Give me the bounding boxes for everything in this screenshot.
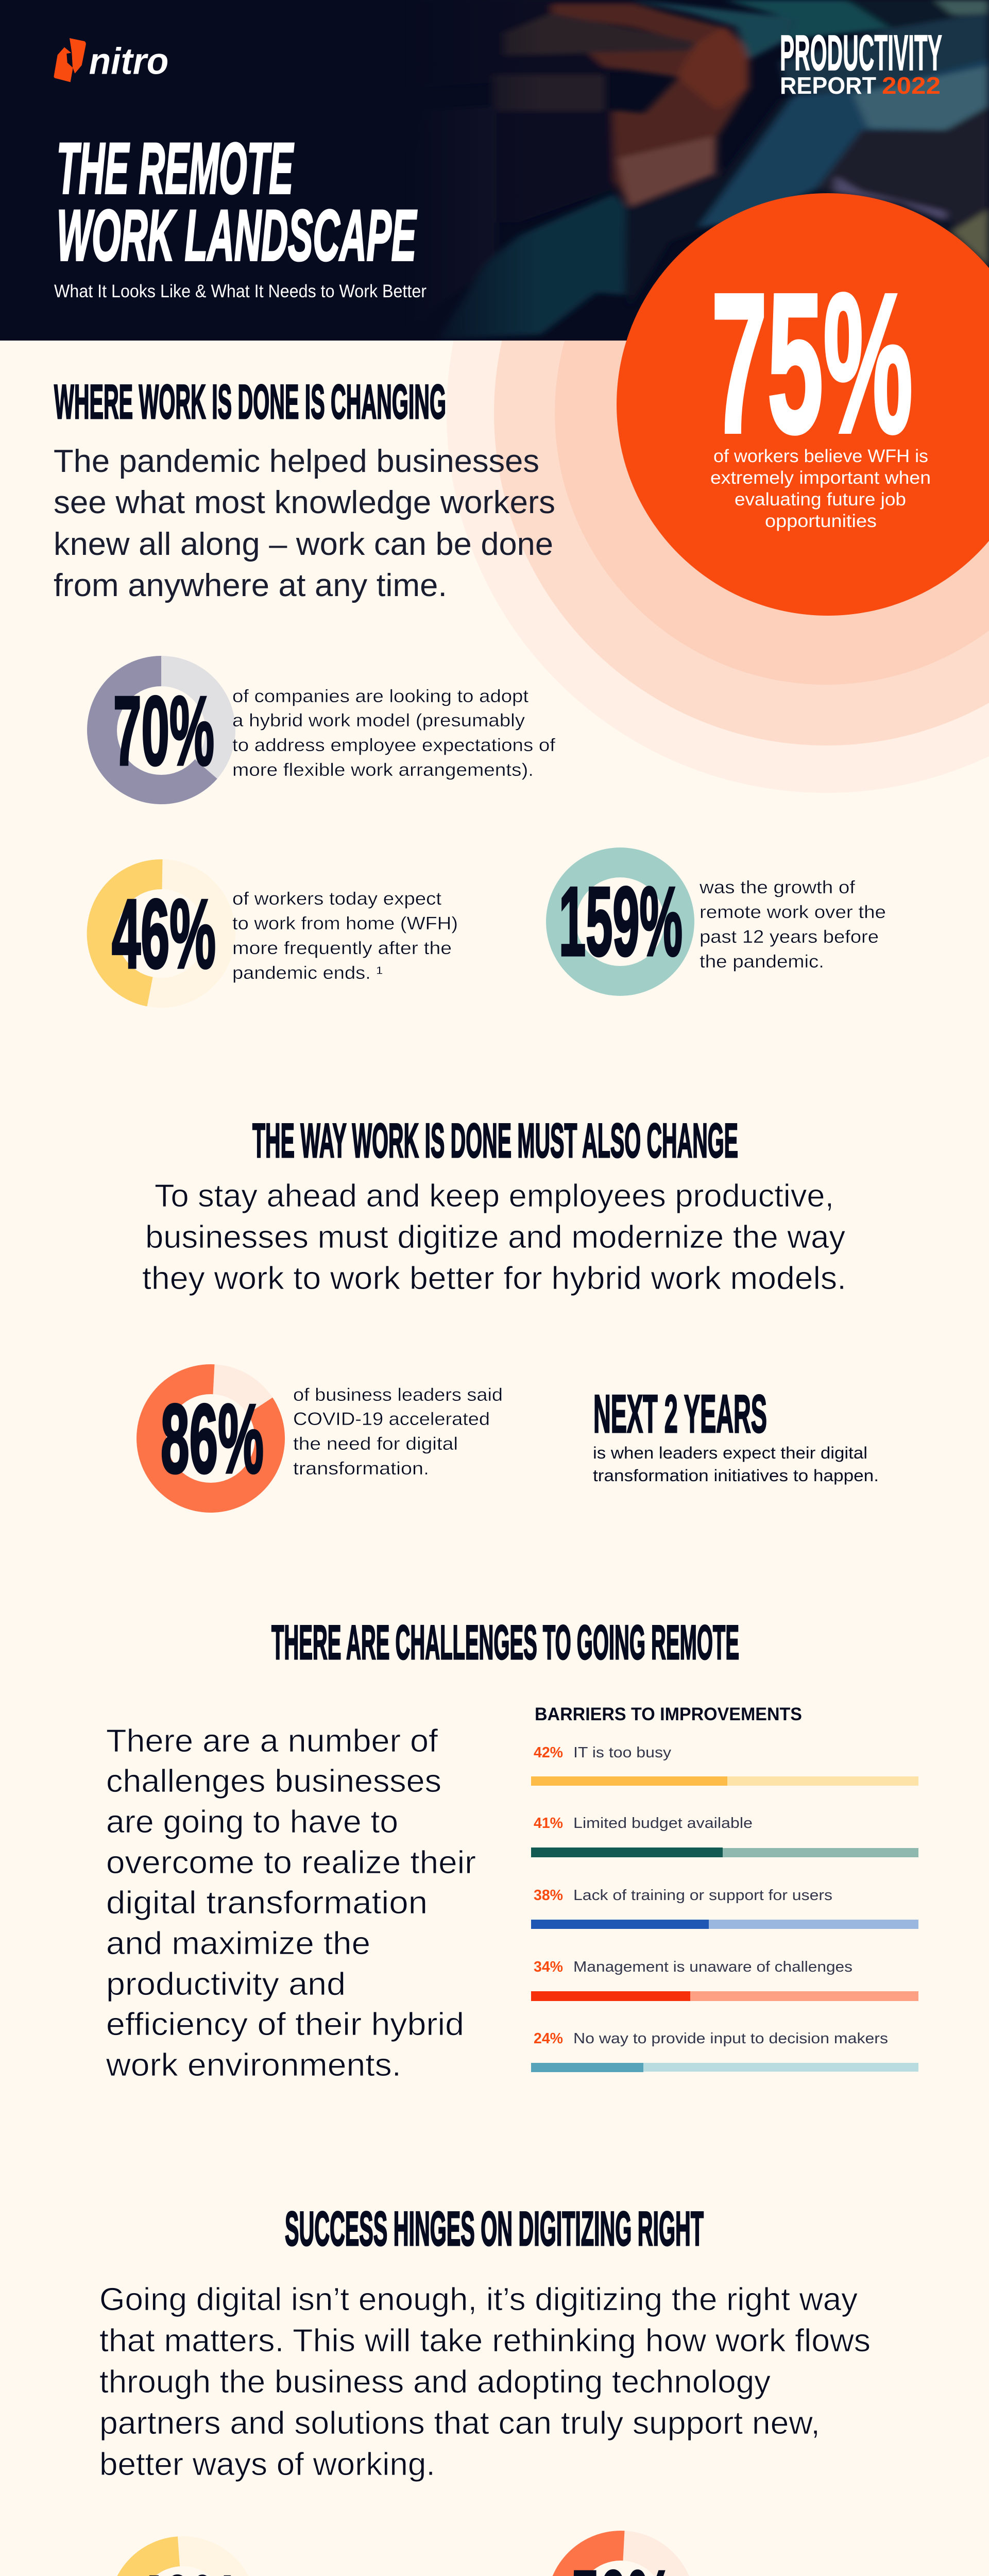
stat: 46 percent WFH: pandemic ends. ¹ xyxy=(232,963,383,983)
text block: challenges: digital transformation xyxy=(106,1885,428,1921)
stat: 70 percent hybrid xyxy=(87,656,555,804)
callout: 75 percent circle: extremely important when xyxy=(710,468,931,488)
bar: no way to provide input xyxy=(531,2030,918,2072)
stat: 46 percent WFH: 46% xyxy=(112,879,216,989)
bar: limited budget: 41% xyxy=(534,1815,563,1832)
bar: lack of training: Lack of training or support for users xyxy=(573,1887,832,1904)
stat: 159 percent growth: 159% xyxy=(559,867,683,976)
stat: 70 percent hybrid: 70% xyxy=(113,676,214,786)
bar: IT is too busy xyxy=(531,1744,918,1786)
bar: no way to provide input: No way to provide input to decision makers xyxy=(573,2030,888,2047)
stat: 46 percent WFH: to work from home (WFH) xyxy=(232,913,458,934)
stat: 86 percent leaders: transformation. xyxy=(293,1459,429,1479)
intro text: the way work is done: businesses must digitize and modernize the way xyxy=(145,1219,845,1255)
stat: 86 percent leaders: 86% xyxy=(161,1384,264,1494)
stat: 159 percent growth: the pandemic. xyxy=(700,952,824,972)
stat: 46 percent WFH: of workers today expect xyxy=(232,889,441,909)
stat: 86 percent leaders xyxy=(137,1364,503,1513)
bar: IT is too busy: IT is too busy xyxy=(573,1744,672,1761)
stat: 86 percent leaders: of business leaders said xyxy=(293,1385,503,1405)
text block: challenges: are going to have to xyxy=(106,1804,398,1840)
bar: lack of training xyxy=(531,1887,918,1929)
bar: management unaware: 34% xyxy=(534,1959,563,1975)
intro text: success hinges: partners and solutions that can truly support new, xyxy=(99,2405,820,2441)
title: WORK LANDSCAPE xyxy=(57,195,417,276)
stat: next 2 years: transformation initiatives to happen. xyxy=(593,1466,879,1485)
intro text: success hinges: that matters. This will take rethinking how work flows xyxy=(99,2323,871,2359)
intro text: where work is done: knew all along – work can be done xyxy=(54,527,553,562)
chart title: BARRIERS TO IMPROVEMENTS xyxy=(535,1704,802,1724)
stat: 46 percent WFH xyxy=(87,859,458,1008)
decorative concentric rings xyxy=(447,341,989,793)
stat: 70 percent hybrid: of companies are looking to adopt xyxy=(232,686,528,706)
intro text: where work is done xyxy=(54,444,555,603)
bar: limited budget xyxy=(531,1815,918,1857)
productivity report badge: REPORT xyxy=(780,72,876,99)
intro text: success hinges: through the business and adopting technology xyxy=(99,2364,771,2400)
bar: limited budget: Limited budget available xyxy=(573,1815,753,1832)
stat: next 2 years: is when leaders expect their digital xyxy=(593,1444,867,1462)
title: THE REMOTE xyxy=(57,128,294,209)
stat: 86 percent leaders: the need for digital xyxy=(293,1434,458,1454)
stat: 46 percent WFH: more frequently after the xyxy=(232,938,452,958)
nitro logo top xyxy=(54,38,168,82)
intro text: success hinges: Going digital isn’t enough, it’s digitizing the right way xyxy=(99,2282,858,2317)
intro text: success hinges xyxy=(99,2282,871,2482)
productivity report badge xyxy=(780,25,942,99)
text: WHERE WORK IS DONE IS CHANGING xyxy=(54,375,446,429)
nitro logo top: nitro xyxy=(89,41,168,82)
text block: challenges: challenges businesses xyxy=(106,1764,441,1799)
bar: IT is too busy: 42% xyxy=(534,1744,563,1761)
text block: challenges: work environments. xyxy=(106,2047,401,2083)
stat: 159 percent growth xyxy=(546,848,886,996)
intro text: where work is done: see what most knowledge workers xyxy=(54,485,555,520)
bar: management unaware xyxy=(531,1959,918,2001)
intro text: success hinges: better ways of working. xyxy=(99,2447,435,2482)
text block: challenges: There are a number of xyxy=(106,1723,438,1759)
intro text: the way work is done: To stay ahead and keep employees productive, xyxy=(155,1178,834,1214)
productivity report badge: 2022 xyxy=(882,72,941,99)
intro text: where work is done: The pandemic helped businesses xyxy=(54,444,539,479)
bar: management unaware: Management is unaware of challenges xyxy=(573,1959,852,1975)
callout: 75 percent circle: of workers believe WFH is xyxy=(713,446,928,466)
stat: next 2 years xyxy=(593,1384,879,1485)
callout: 75 percent circle: opportunities xyxy=(765,511,877,531)
subtitle: What It Looks Like & What It Needs to Work Better xyxy=(54,281,427,301)
stat: next 2 years: NEXT 2 YEARS xyxy=(593,1384,767,1444)
bar: lack of training: 38% xyxy=(534,1887,563,1904)
stat: 86 percent leaders: COVID-19 accelerated xyxy=(293,1409,490,1429)
callout: 75 percent circle: evaluating future job xyxy=(735,489,906,510)
stat: 50 percent tools xyxy=(547,2531,894,2576)
bar: no way to provide input: 24% xyxy=(534,2030,563,2047)
text block: challenges: productivity and xyxy=(106,1967,346,2002)
text block: challenges: and maximize the xyxy=(106,1926,370,1961)
text block: challenges xyxy=(106,1723,476,2083)
text block: challenges: overcome to realize their xyxy=(106,1845,476,1880)
intro text: the way work is done: they work to work better for hybrid work models. xyxy=(142,1261,846,1296)
stat: 159 percent growth: past 12 years before xyxy=(700,927,879,947)
bar chart: barriers to improvements xyxy=(531,1704,918,2072)
stat: 70 percent hybrid: to address employee expectations of xyxy=(232,735,555,755)
intro text: where work is done: from anywhere at any time. xyxy=(54,568,447,603)
stat: 159 percent growth: remote work over the xyxy=(700,902,886,922)
title xyxy=(57,128,417,276)
stat: 70 percent hybrid: a hybrid work model (presumably xyxy=(232,710,525,731)
text block: challenges: efficiency of their hybrid xyxy=(106,2007,464,2042)
stat: 40 percent workflows xyxy=(109,2536,458,2576)
stat: 70 percent hybrid: more flexible work arrangements). xyxy=(232,760,534,780)
stat: 159 percent growth: was the growth of xyxy=(699,877,855,897)
callout: 75 percent circle xyxy=(617,193,989,616)
intro text: the way work is done xyxy=(142,1178,846,1296)
header banner with blurred background art xyxy=(0,0,989,341)
